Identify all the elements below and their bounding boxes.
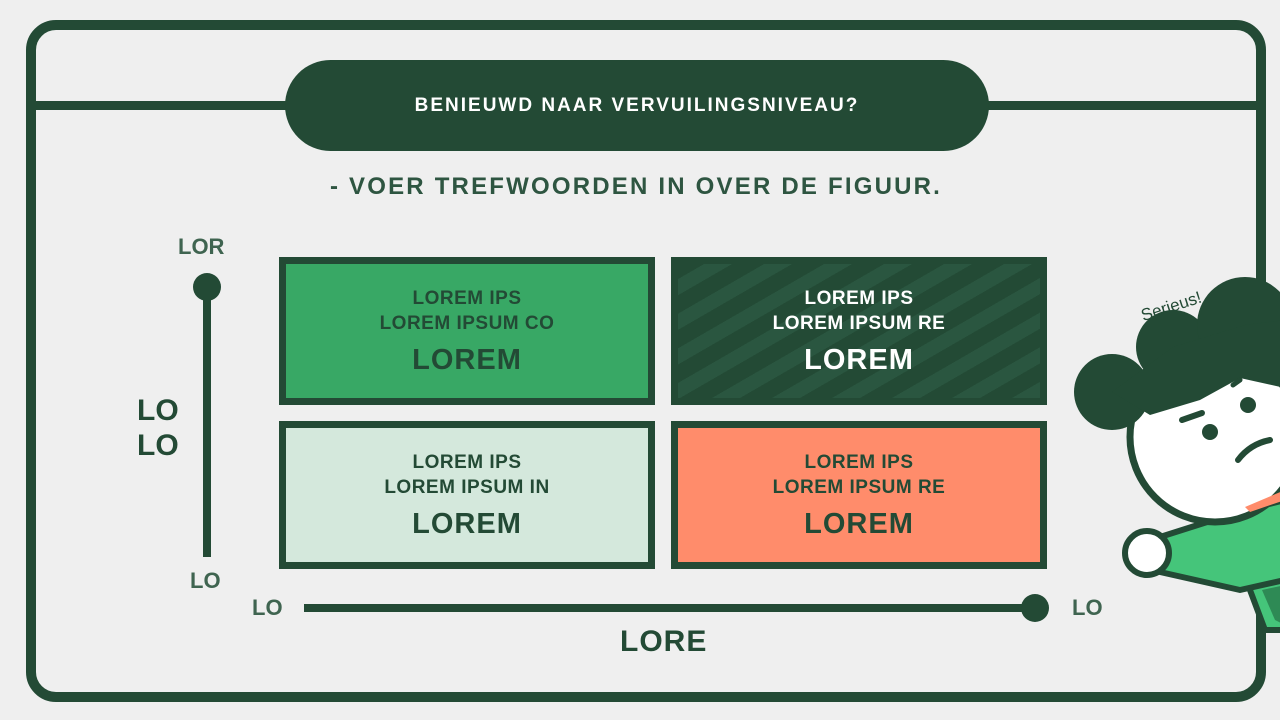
text: LO [137,394,179,427]
quadrant: bottom-right: LOREM IPSUM RE [773,476,945,498]
quadrant: bottom-left: LOREM [412,508,522,540]
header line [30,101,1260,110]
quadrant: bottom-left: LOREM IPS [412,452,522,472]
title pill [285,60,989,151]
quadrant: bottom-left [279,421,655,569]
x axis [304,594,1049,622]
text: LO [190,568,221,593]
quadrant: top-right: LOREM IPS [804,288,914,308]
y axis [193,273,221,557]
x axis labels: LO [252,595,283,620]
quadrant: bottom-left: LOREM IPSUM IN [384,476,550,498]
hair [1074,354,1150,430]
speech: Serieus! [1139,288,1204,325]
quadrant: bottom-right: LOREM [804,508,914,540]
quadrant: top-right [671,257,1047,405]
quadrant: top-left: LOREM IPS [412,288,522,308]
text: LO [137,429,179,462]
character [1074,277,1280,633]
arm [1160,500,1280,590]
eyes [1202,424,1218,440]
text: LORE [620,625,707,658]
quadrant: top-left: LOREM [412,344,522,376]
title pill: BENIEUWD NAAR VERVUILINGSNIVEAU? [415,94,859,116]
face [1130,352,1280,522]
quadrant: bottom-right: LOREM IPS [804,452,914,472]
quadrant: top-left [279,257,655,405]
body [1230,480,1280,630]
quadrant: top-right: LOREM IPSUM RE [773,312,945,334]
y axis labels: LOR [178,234,224,259]
text: LO [1072,595,1103,620]
subtitle: - VOER TREFWOORDEN IN OVER DE FIGUUR. [330,173,942,200]
quadrant: top-left: LOREM IPSUM CO [380,312,554,334]
quadrant: top-right: LOREM [804,344,914,376]
quadrant: bottom-right [671,421,1047,569]
